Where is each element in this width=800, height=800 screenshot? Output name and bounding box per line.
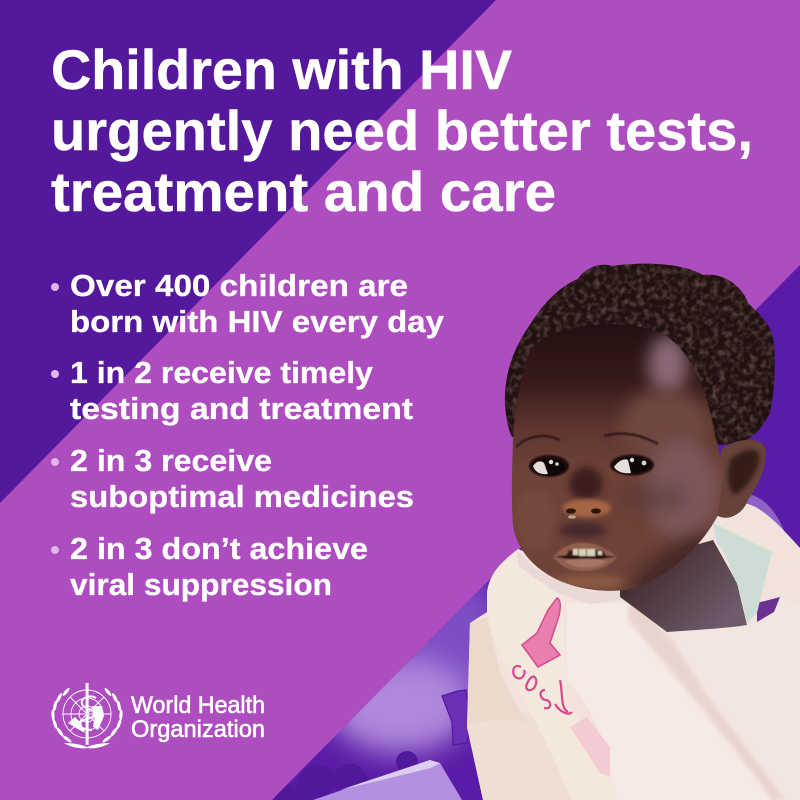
title: Children with HIV	[51, 38, 512, 101]
icon: WHO emblem	[51, 683, 123, 748]
eyebrows	[516, 436, 560, 447]
shirt dark gap	[757, 597, 780, 622]
pink butterfly print	[522, 598, 560, 667]
bullet 2: timely testing: 1 in 2 receive timely	[70, 355, 374, 390]
title: urgently need better tests,	[51, 99, 753, 162]
bullet 3: suboptimal medicines: suboptimal medicines	[70, 479, 414, 514]
shirt right drape	[667, 597, 800, 800]
nose	[563, 499, 611, 519]
WHO logo	[51, 683, 265, 748]
pale green collar	[713, 523, 772, 623]
forehead highlight	[648, 335, 688, 395]
shirt base	[467, 503, 800, 800]
bullet list	[51, 268, 445, 602]
photo: child	[467, 258, 800, 800]
right cheek	[646, 440, 718, 540]
face	[512, 324, 724, 591]
shirt soft fold shading	[628, 603, 785, 800]
panel: photo background diagonal	[270, 265, 800, 800]
shirt fold bottom left	[467, 711, 572, 800]
shirt halo	[745, 494, 787, 540]
flower outline	[442, 690, 470, 745]
booklet	[313, 760, 462, 800]
bullet 1: over 400 children: born with HIV every day	[70, 304, 445, 339]
title	[51, 38, 753, 223]
eyes	[529, 454, 654, 477]
panel: dark purple diagonal top-left	[0, 0, 496, 503]
WHO wordmark: Organization	[131, 716, 265, 743]
pink curly print	[513, 666, 572, 714]
shirt front drape	[567, 603, 775, 800]
bullet 4: viral suppression: viral suppression	[70, 567, 332, 602]
pale pink print strip	[570, 717, 610, 777]
under eye shade	[618, 484, 686, 512]
philtrum shadow	[559, 522, 607, 538]
nose bridge shadow	[569, 467, 603, 501]
WHO wordmark: World Health	[131, 692, 265, 719]
collar left	[517, 550, 620, 604]
ear	[715, 440, 765, 518]
left cheek	[514, 529, 515, 530]
bullet 4: viral suppression	[51, 531, 368, 602]
bullet 1: over 400 children: Over 400 children are	[70, 268, 408, 303]
bullet 2: timely testing	[51, 355, 413, 426]
neck	[620, 540, 747, 632]
bullet 2: timely testing: testing and treatment	[70, 391, 413, 426]
chin	[554, 575, 626, 589]
flower pattern	[274, 751, 418, 800]
title: treatment and care	[51, 160, 556, 223]
jaw shadow	[625, 526, 710, 590]
bullet 1: over 400 children	[51, 268, 445, 339]
hair	[500, 258, 780, 448]
mouth	[553, 543, 617, 571]
shirt left drape	[487, 549, 617, 800]
bullet 3: suboptimal medicines	[51, 443, 414, 514]
WHO wordmark	[131, 692, 265, 743]
bullet 3: suboptimal medicines: 2 in 3 receive	[70, 443, 272, 478]
bullet 4: viral suppression: 2 in 3 don’t achieve	[70, 531, 368, 566]
